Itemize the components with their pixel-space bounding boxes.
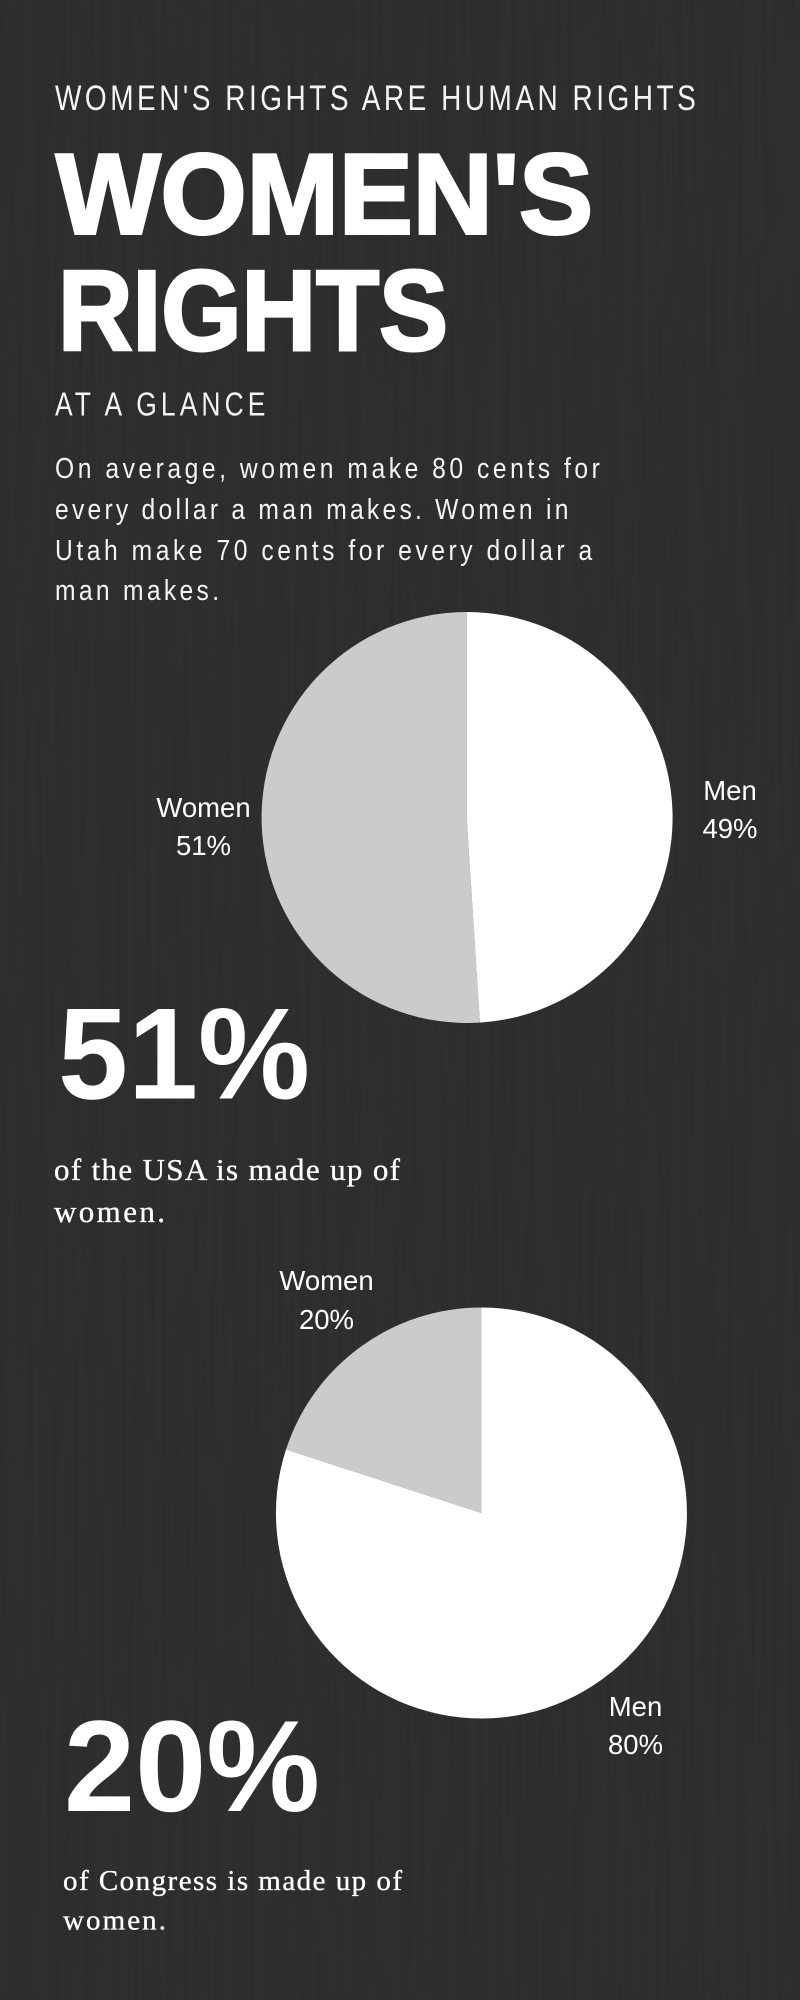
label: men 49% (702, 775, 758, 844)
label: women 51% (156, 792, 251, 861)
label: women 20% (279, 1265, 374, 1335)
label: women 20%: 20% (299, 1304, 354, 1335)
label: men 80%: 80% (608, 1729, 663, 1760)
label: men 49%: Men (703, 775, 757, 806)
stat caption: Congress (63, 1865, 402, 1936)
slice: men 49% (467, 612, 673, 1023)
stat caption: Congress: women. (63, 1904, 166, 1936)
intro paragraph: every dollar a man makes. Women in (55, 493, 568, 525)
slice: women 20% (286, 1308, 482, 1513)
big stat: 20%: 20% (64, 1693, 320, 1839)
label: women 51%: 51% (176, 830, 231, 861)
subheading: AT A GLANCE (55, 387, 265, 423)
pie chart: Congress (276, 1308, 687, 1718)
label: women 51%: Women (156, 792, 251, 823)
intro paragraph: man makes. (55, 574, 219, 606)
pie chart: USA population (262, 612, 673, 1023)
slice: men 80% (276, 1308, 687, 1718)
stat caption: USA (54, 1152, 401, 1229)
slice: women 51% (262, 612, 480, 1023)
eyebrow heading: WOMEN'S RIGHTS ARE HUMAN RIGHTS (55, 78, 696, 118)
intro paragraph: On average, women make 80 cents for (55, 452, 600, 484)
main title (56, 132, 593, 375)
title line 2: RIGHTS (58, 248, 448, 375)
intro paragraph: Utah make 70 cents for every dollar a (55, 534, 592, 566)
label: men 80%: Men (609, 1691, 662, 1722)
title line 1: WOMEN'S (56, 132, 593, 258)
stat caption: Congress: of Congress is made up of (63, 1865, 402, 1897)
label: men 49%: 49% (702, 813, 758, 844)
stat caption: USA: women. (54, 1194, 165, 1229)
stat caption: USA: of the USA is made up of (54, 1152, 401, 1187)
label: women 20%: Women (279, 1265, 374, 1296)
intro paragraph (55, 452, 600, 606)
label: men 80% (608, 1691, 663, 1760)
big stat: 51%: 51% (58, 980, 310, 1126)
